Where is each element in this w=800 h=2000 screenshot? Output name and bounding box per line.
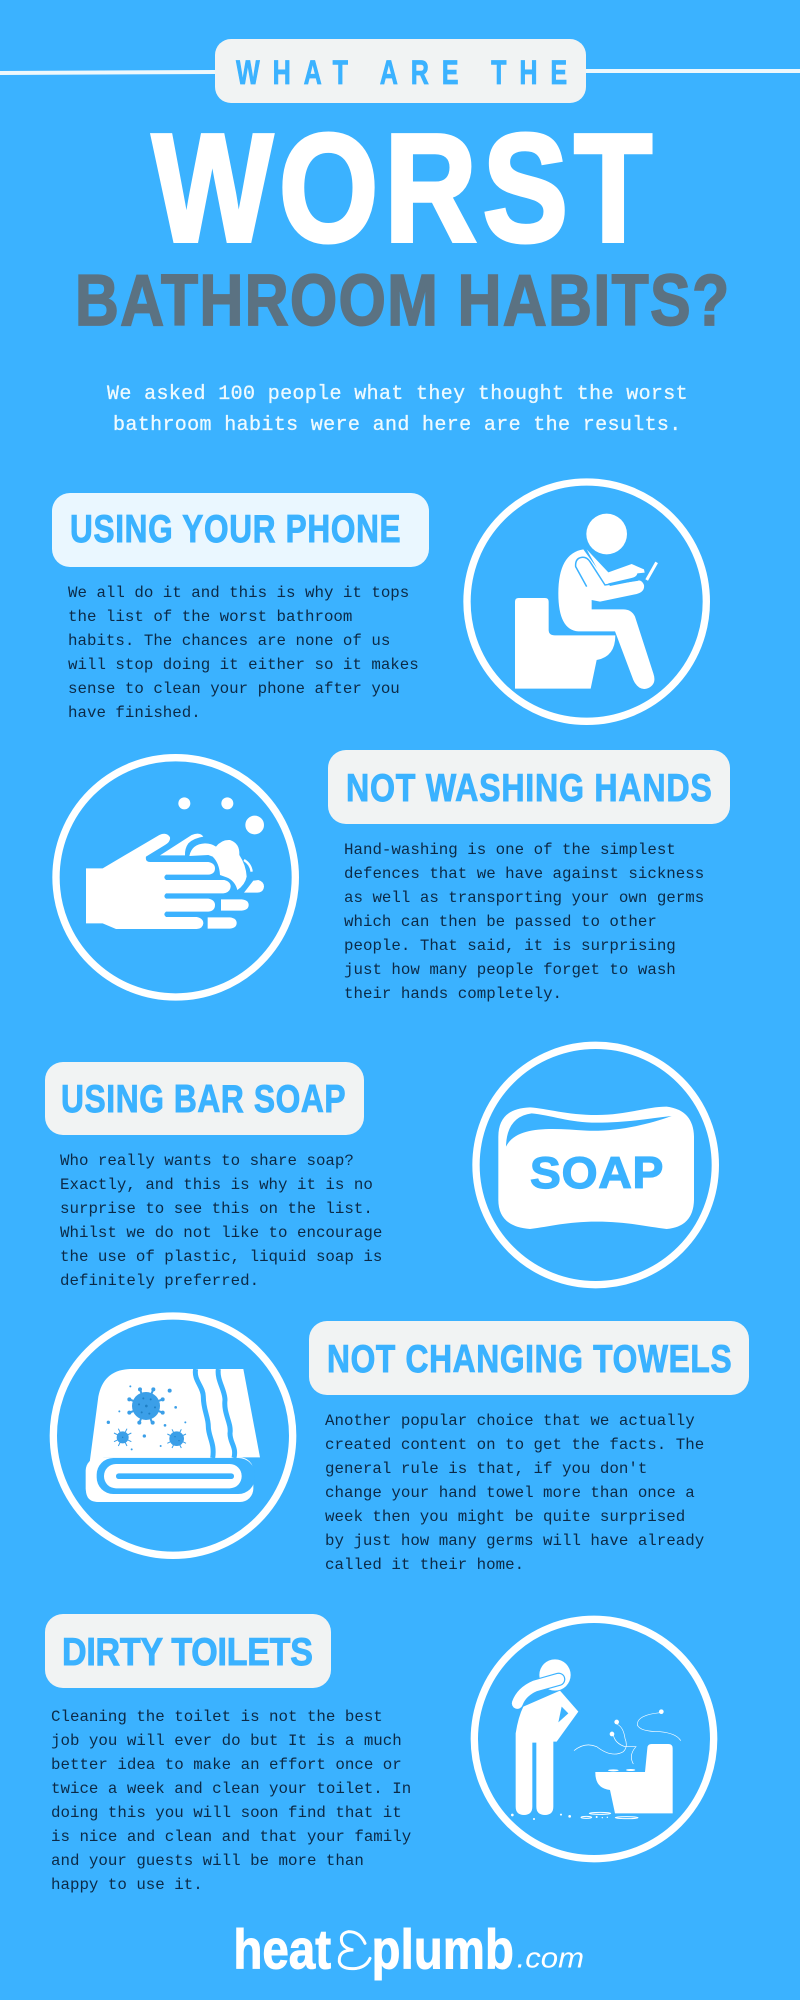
body text: Whilst we do not like to encourage — [60, 1224, 382, 1242]
body text: definitely preferred. — [60, 1272, 259, 1290]
panel: using your phone — [52, 482, 706, 722]
icon: person disgusted by dirty toilet — [474, 1619, 714, 1859]
icon: person on toilet using phone — [467, 482, 706, 721]
body text: which can then be passed to other — [344, 913, 657, 931]
logo: heat & plumb: .com — [517, 1943, 584, 1974]
icon: soap bar: SOAP — [530, 1148, 663, 1198]
heading: not washing hands: NOT WASHING HANDS — [346, 766, 712, 810]
body text: better idea to make an effort once or — [51, 1756, 402, 1774]
body text: habits. The chances are none of us — [68, 632, 390, 650]
body text: Who really wants to share soap? — [60, 1152, 354, 1170]
body text: as well as transporting your own germs — [344, 889, 704, 907]
heading: using your phone — [52, 493, 429, 567]
body text: Cleaning the toilet is not the best — [51, 1708, 383, 1726]
body text: their hands completely. — [344, 985, 562, 1003]
panel: not washing hands — [56, 750, 730, 1003]
body text: twice a week and clean your toilet. In — [51, 1780, 411, 1798]
body text: general rule is that, if you don't — [325, 1460, 647, 1478]
body text: have finished. — [68, 704, 201, 722]
body text: job you will ever do but It is a much — [51, 1732, 402, 1750]
heading: not changing towels: NOT CHANGING TOWELS — [327, 1338, 732, 1381]
heading: using bar soap: USING BAR SOAP — [61, 1078, 346, 1121]
body text: created content on to get the facts. The — [325, 1436, 704, 1454]
title: bathroom habits: BATHROOM HABITS? — [75, 261, 729, 341]
body text: by just how many germs will have already — [325, 1532, 704, 1550]
header — [0, 39, 800, 437]
body text: sense to clean your phone after you — [68, 680, 400, 698]
panel: not changing towels — [53, 1316, 749, 1574]
body text: defences that we have against sickness — [344, 865, 704, 883]
intro text: bathroom habits were and here are the results. — [113, 414, 682, 437]
logo: heat & plumb: plumb — [372, 1918, 514, 1980]
heading: using your phone: USING YOUR PHONE — [70, 508, 401, 551]
body text: change your hand towel more than once a — [325, 1484, 695, 1502]
body text: just how many people forget to wash — [344, 961, 676, 979]
body text: is nice and clean and that your family — [51, 1828, 411, 1846]
panel: dirty toilets — [45, 1614, 714, 1894]
logo: heat & plumb: heat — [233, 1918, 331, 1980]
body text: Hand-washing is one of the simplest — [344, 841, 676, 859]
body text: will stop doing it either so it makes — [68, 656, 419, 674]
body text: surprise to see this on the list. — [60, 1200, 373, 1218]
body text: called it their home. — [325, 1556, 524, 1574]
body text: happy to use it. — [51, 1876, 203, 1894]
body text: the list of the worst bathroom — [68, 608, 352, 626]
heading: not changing towels — [309, 1321, 749, 1395]
panel: using bar soap — [45, 1045, 715, 1290]
body text: week then you might be quite surprised — [325, 1508, 685, 1526]
icon: germy towel — [53, 1316, 293, 1555]
heading: dirty toilets: DIRTY TOILETS — [62, 1630, 313, 1673]
body text: and your guests will be more than — [51, 1852, 364, 1870]
subtitle pill: WHAT ARE THE — [236, 54, 567, 92]
subtitle pill — [215, 39, 586, 103]
logo: heat & plumb — [233, 1918, 584, 1980]
body text: Exactly, and this is why it is no — [60, 1176, 373, 1194]
heading: not washing hands — [328, 750, 730, 824]
body text: Another popular choice that we actually — [325, 1412, 695, 1430]
heading: dirty toilets — [45, 1614, 331, 1688]
body text: We all do it and this is why it tops — [68, 584, 409, 602]
intro text: We asked 100 people what they thought the worst — [107, 383, 688, 406]
heading: using bar soap — [45, 1062, 364, 1135]
icon: soap bar — [476, 1045, 715, 1285]
body text: doing this you will soon find that it — [51, 1804, 402, 1822]
icon: washing hands — [56, 758, 295, 997]
body text: people. That said, it is surprising — [344, 937, 676, 955]
title: worst: WORST — [152, 103, 652, 275]
body text: the use of plastic, liquid soap is — [60, 1248, 382, 1266]
